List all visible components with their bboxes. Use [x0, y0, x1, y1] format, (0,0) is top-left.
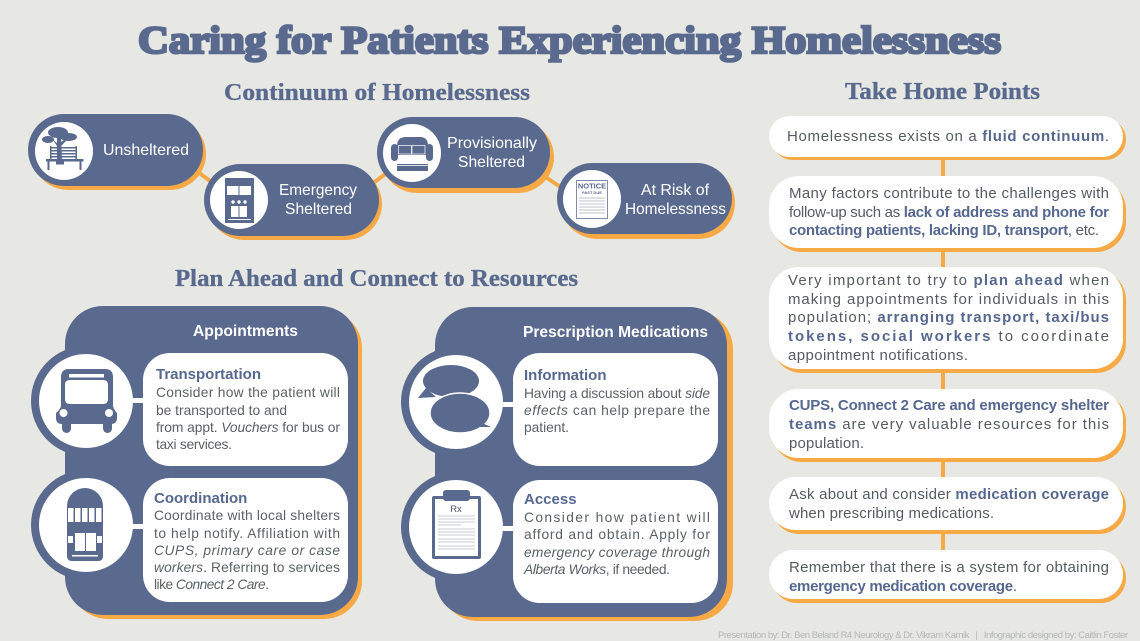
card: coordination: to help notify. Affiliation with [154, 526, 340, 541]
card: coordination: like Connect 2 Care. [154, 577, 269, 592]
point 4: CUPS, Connect 2 Care and emergency shelter [789, 397, 1109, 414]
heading: take home points: Take Home Points [845, 79, 1040, 105]
icon: train [67, 488, 103, 561]
point 3 [769, 267, 1126, 373]
card: access [513, 480, 718, 603]
point 5 [769, 477, 1126, 534]
panel: appointments [31, 306, 362, 619]
pill: unsheltered: Unsheltered [103, 142, 189, 159]
card: coordination: Coordinate with local shelters [154, 508, 340, 523]
point 3: tokens, social workers to coordinate [788, 328, 1109, 345]
point 3: appointment notifications. [788, 347, 968, 364]
heading: appointments: Appointments [193, 323, 298, 340]
point 3: making appointments for individuals in this [788, 291, 1109, 308]
card: information: Information [524, 367, 606, 384]
icon: notice: PAST DUE [582, 190, 602, 195]
icon: sofa [391, 137, 433, 171]
card: access: emergency coverage through [524, 545, 710, 560]
card: access: afford and obtain. Apply for [524, 527, 710, 542]
icon: notice: NOTICE [578, 182, 606, 190]
point 6: Remember that there is a system for obtaining [789, 559, 1109, 576]
card: transportation: taxi services. [156, 437, 232, 452]
card: transportation: Transportation [156, 366, 261, 383]
point 1 [769, 116, 1126, 160]
card: information: patient. [524, 420, 569, 435]
continuum diagram [28, 114, 735, 240]
pill: unsheltered [28, 114, 206, 190]
point 1: Homelessness exists on a fluid continuum. [787, 128, 1109, 145]
point 5: when prescribing medications. [788, 505, 994, 522]
footer credits: Presentation by: Dr. Ben Beland R4 Neurology & Dr. Vikram Karnik | Infographic designed by: Caitlin Foster [718, 630, 1128, 641]
point 2 [769, 176, 1126, 252]
take home points list [769, 116, 1126, 603]
panel: prescription medications [401, 307, 733, 621]
pill: at risk of homelessness: Homelessness [625, 201, 726, 218]
point 6 [769, 550, 1126, 603]
point 2: contacting patients, lacking ID, transport, etc. [789, 222, 1099, 239]
icon: tree and bench [42, 127, 84, 170]
point 2: follow-up such as lack of address and phone for [789, 204, 1109, 221]
card: transportation: be transported to and [156, 403, 287, 418]
card: coordination: CUPS, primary care or case [154, 543, 340, 558]
point 4 [769, 389, 1126, 462]
heading: plan ahead: Plan Ahead and Connect to Resources [175, 266, 578, 292]
card: transportation [143, 353, 348, 466]
point 5: Ask about and consider medication coverage [789, 486, 1109, 503]
pill: at risk of homelessness: At Risk of [641, 182, 710, 199]
icon: bus [56, 369, 117, 433]
point 3: Very important to try to plan ahead when [788, 272, 1109, 289]
pill: emergency sheltered: Emergency [279, 182, 357, 199]
icon: shelter building [225, 178, 254, 223]
card: access: Consider how patient will [524, 510, 710, 525]
card: information: Having a discussion about side [524, 386, 710, 401]
card: transportation: Consider how the patient will [156, 385, 340, 400]
point 4: population. [789, 435, 864, 452]
icon: speech bubbles [418, 365, 491, 433]
pill: provisionally sheltered: Sheltered [458, 154, 525, 171]
heading: prescription medications: Prescription Medications [523, 324, 708, 341]
point 6: emergency medication coverage. [789, 578, 1017, 595]
icon: notice [576, 180, 608, 218]
card: coordination [143, 478, 348, 602]
card: coordination: workers. Referring to services [154, 560, 340, 575]
card: access: Access [524, 491, 577, 508]
point 3: population; arranging transport, taxi/bus [788, 309, 1109, 326]
icon: prescription clipboard [432, 490, 481, 559]
pill: at risk of homelessness [557, 163, 735, 239]
pill: emergency sheltered [204, 164, 382, 240]
card: transportation: from appt. Vouchers for bus or [156, 420, 340, 435]
pill: provisionally sheltered: Provisionally [447, 135, 537, 152]
card: information [513, 353, 718, 466]
heading: continuum: Continuum of Homelessness [224, 80, 530, 106]
card: coordination: Coordination [154, 490, 247, 507]
card: information: effects can help prepare the [524, 403, 710, 418]
icon: prescription clipboard: Rx [450, 504, 462, 515]
title: Caring for Patients Experiencing Homelessness [138, 19, 1001, 62]
pill: emergency sheltered: Sheltered [285, 201, 352, 218]
card: access: Alberta Works, if needed. [523, 562, 670, 577]
point 2: Many factors contribute to the challenges with [789, 185, 1109, 202]
pill: provisionally sheltered [377, 117, 554, 193]
point 4: teams are very valuable resources for this [789, 416, 1109, 433]
